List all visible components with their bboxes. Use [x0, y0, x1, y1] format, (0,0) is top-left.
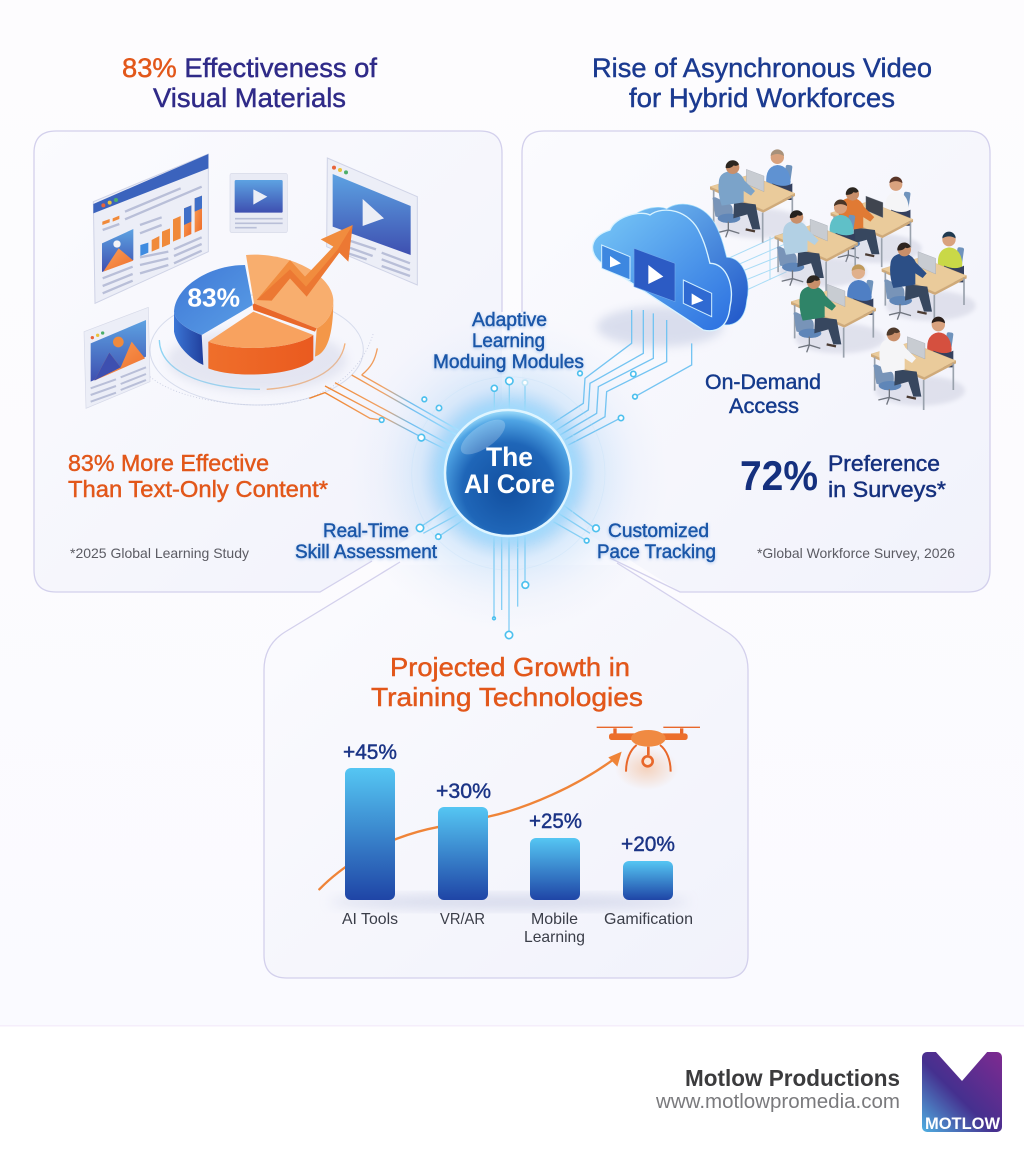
label: real-time skill assessment: Skill Assessment — [295, 542, 438, 563]
panel: projected growth — [264, 562, 748, 978]
bar values — [343, 741, 675, 856]
illustration: pie chart with browser windows — [84, 154, 417, 408]
heading: asynchronous video — [592, 53, 932, 113]
footer brand text: www.motlowpromedia.com — [655, 1091, 900, 1113]
label: adaptive learning modules: Learning — [472, 331, 545, 352]
label: adaptive learning modules: Moduing Modules — [433, 352, 584, 373]
bar labels: Mobile — [531, 911, 578, 928]
bar: VR/AR — [438, 807, 488, 900]
bar labels: AI Tools — [342, 911, 398, 928]
bar labels: Learning — [524, 929, 585, 946]
bar values: +25% — [529, 810, 582, 833]
bar: AI Tools — [345, 768, 395, 900]
label: adaptive learning modules: Adaptive — [472, 310, 547, 331]
cloud shadow — [597, 307, 723, 347]
label: customized pace tracking — [597, 521, 716, 563]
heading: 83% effectiveness: Visual Materials — [153, 83, 346, 113]
icon: video browser window — [327, 158, 417, 285]
heading: 83% effectiveness — [122, 53, 378, 113]
footnote: learning study: *2025 Global Learning Study — [70, 545, 249, 561]
label: real-time skill assessment — [295, 521, 438, 563]
stat: 83% more effective — [68, 450, 328, 502]
desk workers — [710, 149, 976, 410]
AI core sphere: AI Core — [464, 469, 555, 499]
trend arrow — [319, 752, 622, 889]
label: adaptive learning modules — [433, 310, 584, 373]
footnote: workforce survey: *Global Workforce Survey, 2026 — [757, 545, 955, 561]
text: on-demand access: On-Demand — [705, 371, 821, 394]
bar values: +45% — [343, 741, 397, 764]
heading: asynchronous video: Rise of Asynchronous Video — [592, 53, 932, 83]
circuit nodes — [379, 371, 637, 639]
label: real-time skill assessment: Real-Time — [323, 521, 409, 542]
bar: Mobile Learning — [530, 838, 580, 900]
footer band — [0, 1025, 1024, 1154]
icon: small video card — [230, 173, 287, 233]
wires: upper left — [309, 348, 458, 452]
pie value: 83% — [187, 283, 240, 313]
pie chart — [174, 225, 353, 375]
bar labels — [342, 911, 693, 946]
AI core sphere: The — [486, 442, 533, 472]
heading: projected growth: Projected Growth in — [390, 652, 630, 682]
diagram: AI core circuit lines — [309, 310, 692, 639]
panel: asynchronous video — [522, 131, 990, 592]
text: on-demand access — [705, 371, 821, 418]
heading: projected growth: Training Technologies — [371, 682, 643, 712]
wires: lower — [418, 505, 595, 633]
text: on-demand access: Access — [729, 395, 799, 418]
bar labels: VR/AR — [440, 911, 485, 928]
bar: Gamification — [623, 861, 673, 900]
stat: 72% preference: Preference — [828, 451, 940, 476]
wires from cloud to desks — [728, 233, 787, 290]
logo: Motlow — [922, 1051, 1002, 1133]
label: customized pace tracking: Customized — [608, 521, 709, 542]
AI core sphere — [440, 405, 576, 541]
chart: growth bars — [319, 741, 693, 946]
stat: 72% preference — [740, 451, 946, 502]
icon: small image card — [84, 307, 150, 408]
heading: projected growth — [371, 652, 643, 712]
rings under pie — [150, 295, 373, 405]
footer brand text: Motlow Productions — [685, 1065, 900, 1091]
heading: 83% effectiveness: 83% Effectiveness of — [122, 53, 378, 83]
dashed orbit rings — [412, 377, 605, 570]
bar values: +20% — [621, 833, 675, 856]
panel: visual materials — [34, 131, 502, 592]
stat: 72% preference: 72% — [740, 452, 818, 499]
wires: top — [494, 382, 525, 415]
heading: asynchronous video: for Hybrid Workforces — [629, 83, 895, 113]
footer brand text — [655, 1065, 900, 1113]
bar shadows — [329, 895, 689, 909]
stat: 83% more effective: 83% More Effective — [68, 450, 269, 476]
bar values: +30% — [436, 780, 491, 803]
icon: browser window with charts — [93, 154, 208, 303]
label: customized pace tracking: Pace Tracking — [597, 542, 716, 563]
logo: Motlow: MOTLOW — [925, 1114, 1001, 1133]
illustration: cloud and workforce desks — [593, 149, 976, 410]
icon: drone — [597, 727, 700, 790]
stat: 83% more effective: Than Text-Only Content* — [68, 476, 328, 502]
core glow — [348, 313, 668, 633]
icon: video cloud — [593, 204, 748, 331]
stat: 72% preference: in Surveys* — [828, 477, 946, 502]
wires: upper right — [550, 310, 692, 445]
bar labels: Gamification — [604, 911, 693, 928]
